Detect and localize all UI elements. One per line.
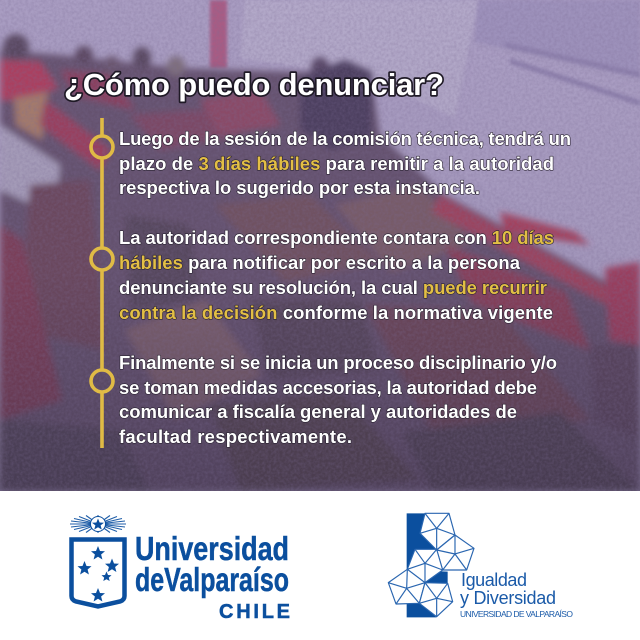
text block 3: comunicar a fiscalía general y autoridades de — [119, 401, 517, 422]
icon: radiant star emblem — [70, 515, 126, 533]
text block 1: Luego de la sesión de la comisión técnica, tendrá un — [119, 128, 571, 149]
background photo: auditorium with purple overlay — [0, 0, 640, 491]
timeline line segments — [100, 118, 104, 448]
text block 2: denunciante su resolución, la cual puede recurrir — [119, 277, 547, 298]
text block 1 — [119, 128, 571, 198]
text block 3: facultad respectivamente. — [119, 426, 352, 447]
text block 2 — [119, 227, 554, 323]
logo wordmark: Igualdad — [461, 570, 527, 590]
timeline — [91, 118, 113, 448]
text block 3 — [119, 352, 557, 447]
text block 3: Finalmente si se inicia un proceso disciplinario y/o — [119, 352, 557, 373]
text block 2: La autoridad correspondiente contara con 10 días — [119, 227, 554, 248]
timeline node 1 — [91, 136, 113, 158]
logo: Igualdad y Diversidad: y Diversidad — [460, 588, 556, 608]
logo wordmark: Universidad — [135, 530, 289, 567]
logo: Igualdad y Diversidad — [388, 513, 573, 619]
text block 3: se toman medidas accesorias, la autoridad debe — [119, 377, 537, 398]
text block 2: contra la decisión conforme la normativa vigente — [119, 302, 553, 323]
logo: Universidad de Valparaíso: deValparaíso — [135, 561, 289, 598]
icon: polygon mesh — [388, 513, 474, 617]
icon: shield with stars — [72, 540, 124, 606]
footer panel — [0, 491, 640, 640]
timeline node 3 — [91, 370, 113, 392]
timeline node 2 — [91, 248, 113, 270]
logo: Universidad de Valparaíso: CHILE — [219, 601, 290, 623]
title: ¿Cómo puedo denunciar? — [64, 67, 444, 102]
text block 2: hábiles para notificar por escrito a la persona — [119, 252, 521, 273]
logo: Igualdad y Diversidad: UNIVERSIDAD DE VALPARAÍSO — [460, 609, 573, 619]
text block 1: plazo de 3 días hábiles para remitir a la autoridad — [119, 153, 554, 174]
heads at the back — [3, 34, 29, 60]
logo: Universidad de Valparaíso — [70, 515, 290, 623]
text block 1: respectiva lo sugerido por esta instancia. — [119, 177, 480, 198]
